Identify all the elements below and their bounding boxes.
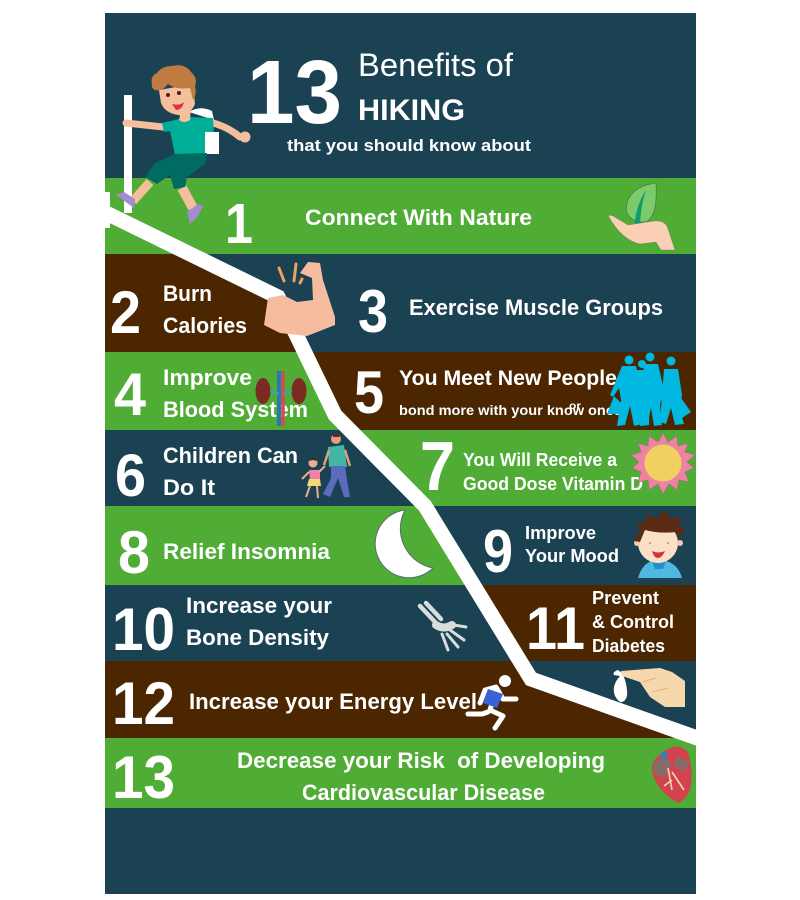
benefit 5 (354, 359, 622, 426)
benefit 2: Burn (163, 281, 212, 306)
benefit 5: bond more with your know ones (399, 403, 622, 418)
benefit 12 (112, 670, 477, 737)
benefit 11: & Control (592, 612, 674, 632)
title (247, 43, 531, 155)
benefit 13 (112, 744, 605, 811)
benefit 2: Calories (163, 313, 247, 338)
benefit 3: Exercise Muscle Groups (409, 295, 663, 320)
infographic (105, 13, 696, 894)
icon: runner with device (468, 675, 516, 728)
benefit 11: Prevent (592, 588, 659, 608)
benefit 10: Bone Density (186, 625, 330, 650)
benefit 4: 4 (114, 361, 147, 428)
benefit 7 (420, 427, 643, 505)
benefit 10 (112, 593, 332, 663)
title: HIKING (358, 94, 465, 127)
icon: flexed muscle (264, 262, 335, 336)
benefit 7: You Will Receive a (463, 450, 618, 470)
benefit 10: 10 (112, 596, 175, 663)
icon: finger with drop (614, 668, 685, 707)
benefit 12: Increase your Energy Level (189, 689, 477, 714)
benefit 1: 1 (225, 192, 253, 256)
icon: hiker with pole (116, 65, 250, 224)
benefit 4 (114, 361, 308, 428)
benefit 2: 2 (110, 279, 141, 346)
benefit 6: Do It (163, 475, 216, 500)
title: that you should know about (287, 136, 531, 155)
benefit 11: 11 (526, 595, 585, 662)
benefit 6: Children Can (163, 443, 298, 468)
icon: parent and child walking (302, 433, 350, 498)
benefit 3 (358, 278, 663, 345)
trail line (100, 210, 700, 739)
benefit 7: 7 (420, 427, 455, 505)
benefit 10: Increase your (186, 593, 332, 618)
benefit 1: Connect With Nature (305, 205, 532, 230)
benefit 9: Your Mood (525, 546, 619, 566)
benefit 4: Blood System (163, 397, 308, 422)
icon: leaf in hand (609, 183, 675, 250)
benefit 7: Good Dose Vitamin D (463, 474, 643, 494)
benefit 13: 13 (112, 744, 175, 811)
title: Benefits of (358, 47, 513, 83)
benefit 5: You Meet New People (399, 367, 617, 390)
icon: sun (631, 433, 695, 494)
benefit 13: Cardiovascular Disease (302, 780, 545, 805)
benefit 11 (526, 588, 674, 662)
benefit 9: Improve (525, 523, 596, 543)
panel: right side bands (207, 254, 696, 730)
benefit 11: Diabetes (592, 636, 665, 656)
benefit 8: Relief Insomnia (163, 539, 331, 564)
band: benefit 1 (105, 178, 696, 254)
benefit 5: or (569, 401, 581, 412)
benefit 8 (118, 519, 331, 586)
panel: background (105, 13, 696, 894)
benefit 3: 3 (358, 278, 388, 345)
benefit 9 (483, 518, 619, 585)
benefit 2 (110, 279, 247, 346)
benefit 1 (225, 192, 532, 256)
trail start marker (105, 192, 110, 228)
benefit 8: 8 (118, 519, 150, 586)
benefit 5: 5 (354, 359, 384, 426)
benefit 6: 6 (115, 442, 146, 509)
band: benefit 13 (105, 738, 696, 808)
benefit 13: Decrease your Risk of Developing (237, 748, 605, 773)
benefit 4: Improve (163, 365, 252, 390)
benefit 9: 9 (483, 518, 513, 585)
icon: hand bones (420, 603, 466, 650)
panel: left side bands (105, 254, 696, 738)
title: 13 (247, 43, 342, 143)
icon: heart (652, 746, 692, 803)
benefit 12: 12 (112, 670, 175, 737)
icon: smiling boy (634, 510, 685, 578)
benefit 6 (115, 442, 298, 509)
icon: crescent moon (375, 510, 433, 578)
icon: kidneys and blood vessels (256, 371, 306, 426)
icon: group of people (607, 352, 691, 426)
